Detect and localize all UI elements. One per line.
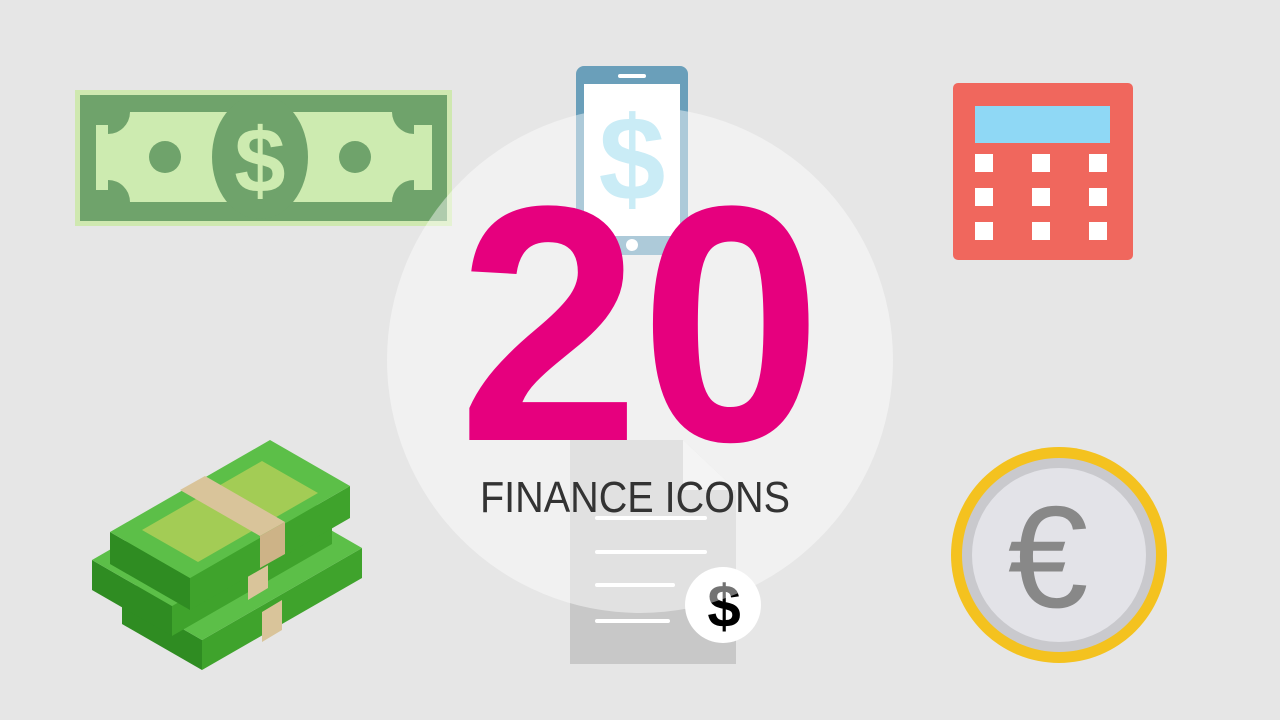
icon: money stacks [92,440,362,670]
subtitle: FINANCE ICONS [480,473,790,522]
center circle overlay [387,107,893,613]
icon: dollar bill: $ [234,110,286,212]
icon: phone [576,66,688,255]
icon: euro coin: € [1008,476,1088,638]
icon: document: $ [707,573,741,640]
icon: document [570,440,761,664]
icon: dollar bill [75,90,452,226]
icon: phone: $ [599,92,665,226]
icon: euro coin [951,447,1167,663]
big number 20: 20 [458,137,822,512]
icon: calculator [953,83,1133,260]
